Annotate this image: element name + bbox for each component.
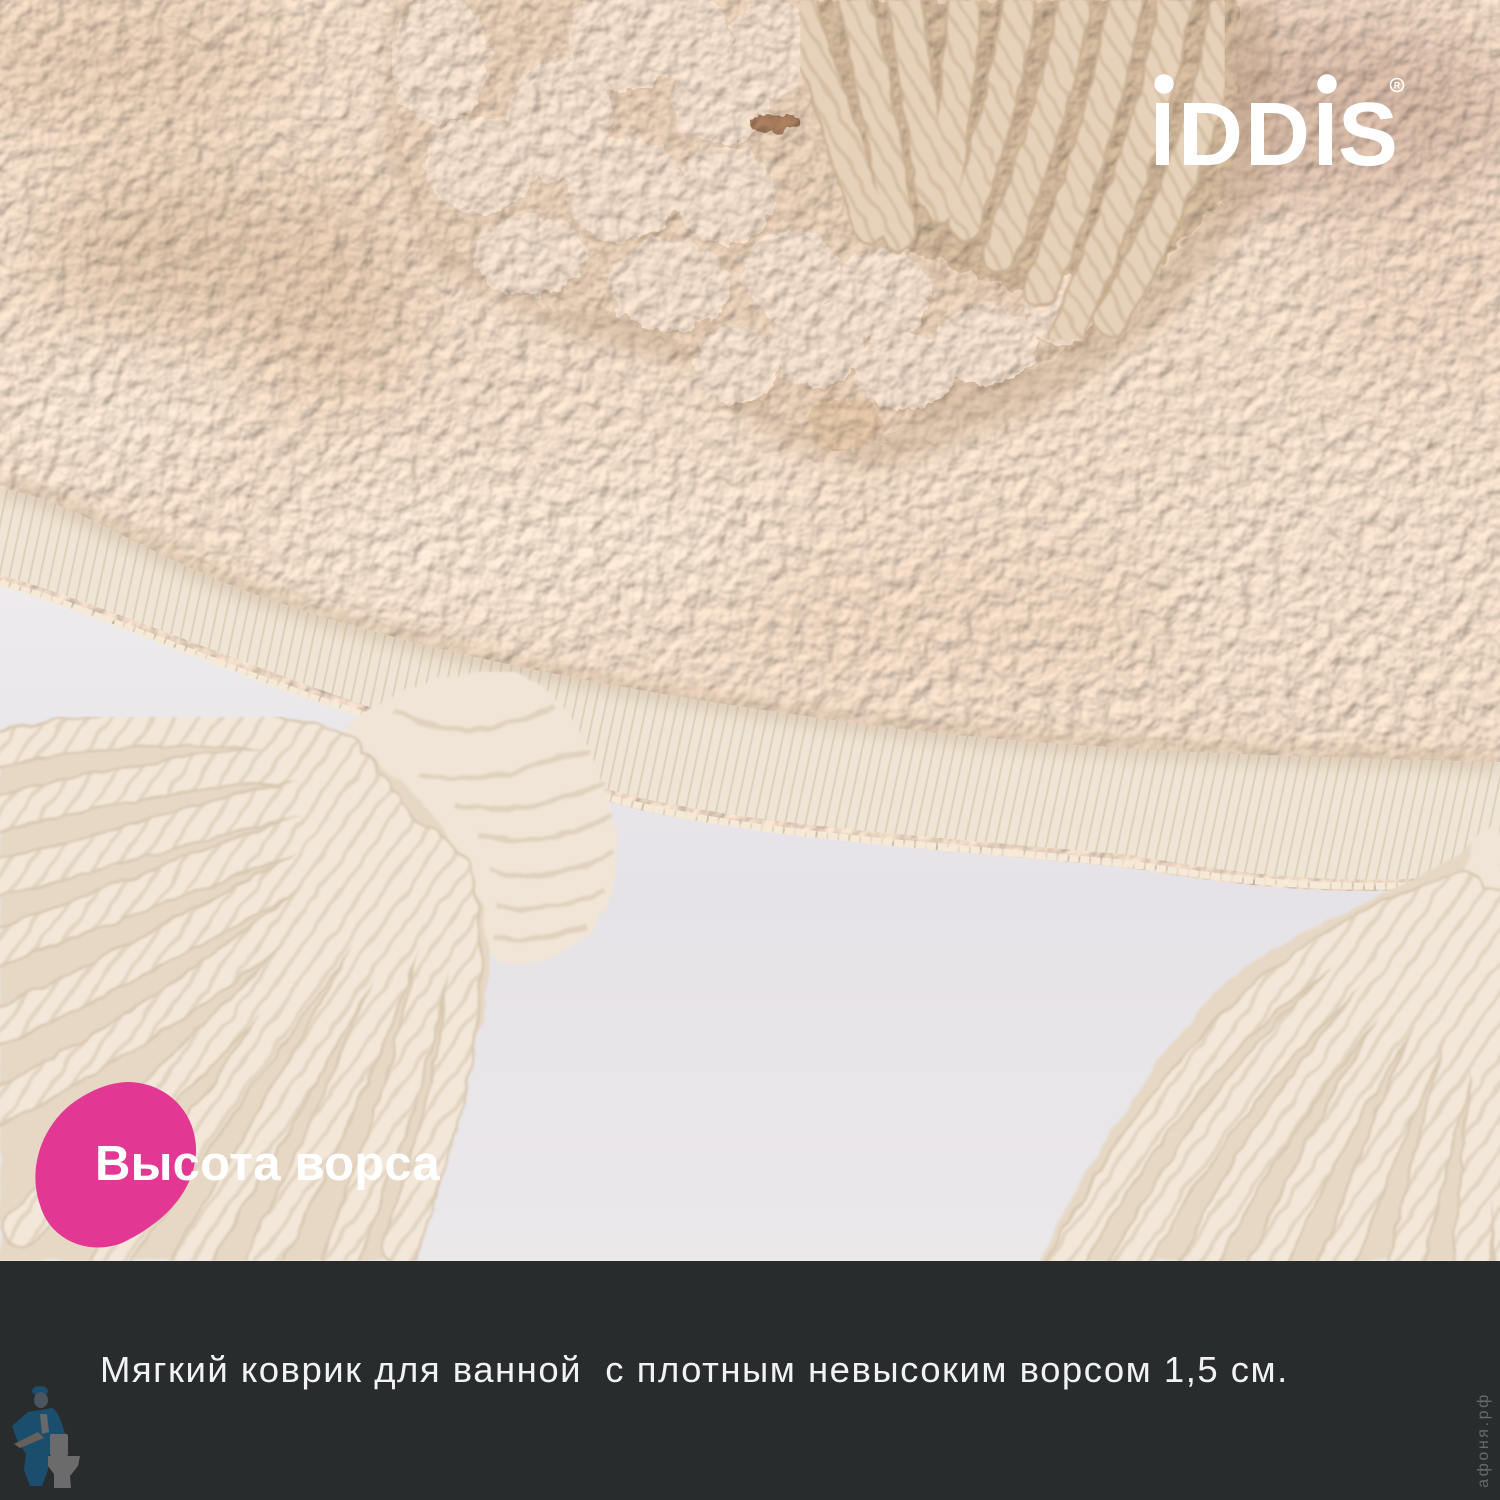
heading: pile height: Высота ворса xyxy=(95,1137,440,1191)
top tassel pile with tufts xyxy=(390,0,1240,451)
mat edge: stitched cord border xyxy=(0,488,1500,886)
pink accent blob xyxy=(35,1082,196,1247)
white table surface xyxy=(0,585,1500,1261)
iDDiS logo: IDDIS xyxy=(1150,85,1398,185)
left tassel xyxy=(0,672,618,1261)
top tassel pile shadow xyxy=(385,0,1270,470)
watermark: afonya.rf: афоня.рф xyxy=(1475,1392,1492,1488)
iDDiS logo: R xyxy=(1394,80,1401,90)
left tassel head xyxy=(345,672,618,965)
pile surface of the mat xyxy=(0,0,1500,980)
right tassel xyxy=(1040,822,1500,1270)
dark caption bar xyxy=(0,1261,1500,1500)
icon: plumber with toilet xyxy=(12,1386,80,1488)
top tassel strands xyxy=(800,0,1225,340)
left tassel strands xyxy=(0,717,490,1261)
caption text: Мягкий коврик для ванной с плотным невысоким ворсом 1,5 см. xyxy=(100,1349,1289,1390)
